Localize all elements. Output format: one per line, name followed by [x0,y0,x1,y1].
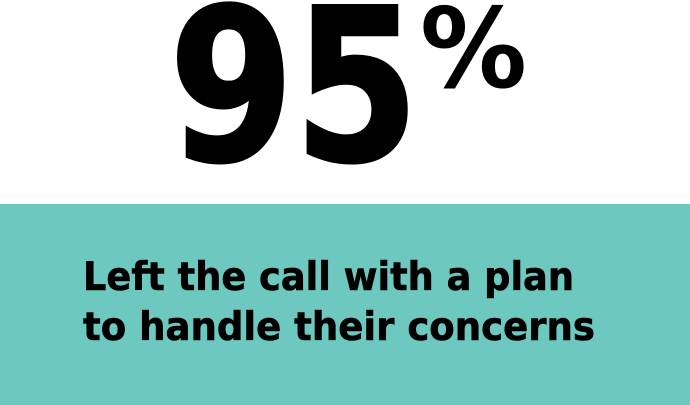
caption text: to handle their concerns [83,305,595,350]
panel: teal caption band [0,204,690,405]
caption text: Left the call with a plan [83,255,574,300]
caption text [83,255,595,350]
